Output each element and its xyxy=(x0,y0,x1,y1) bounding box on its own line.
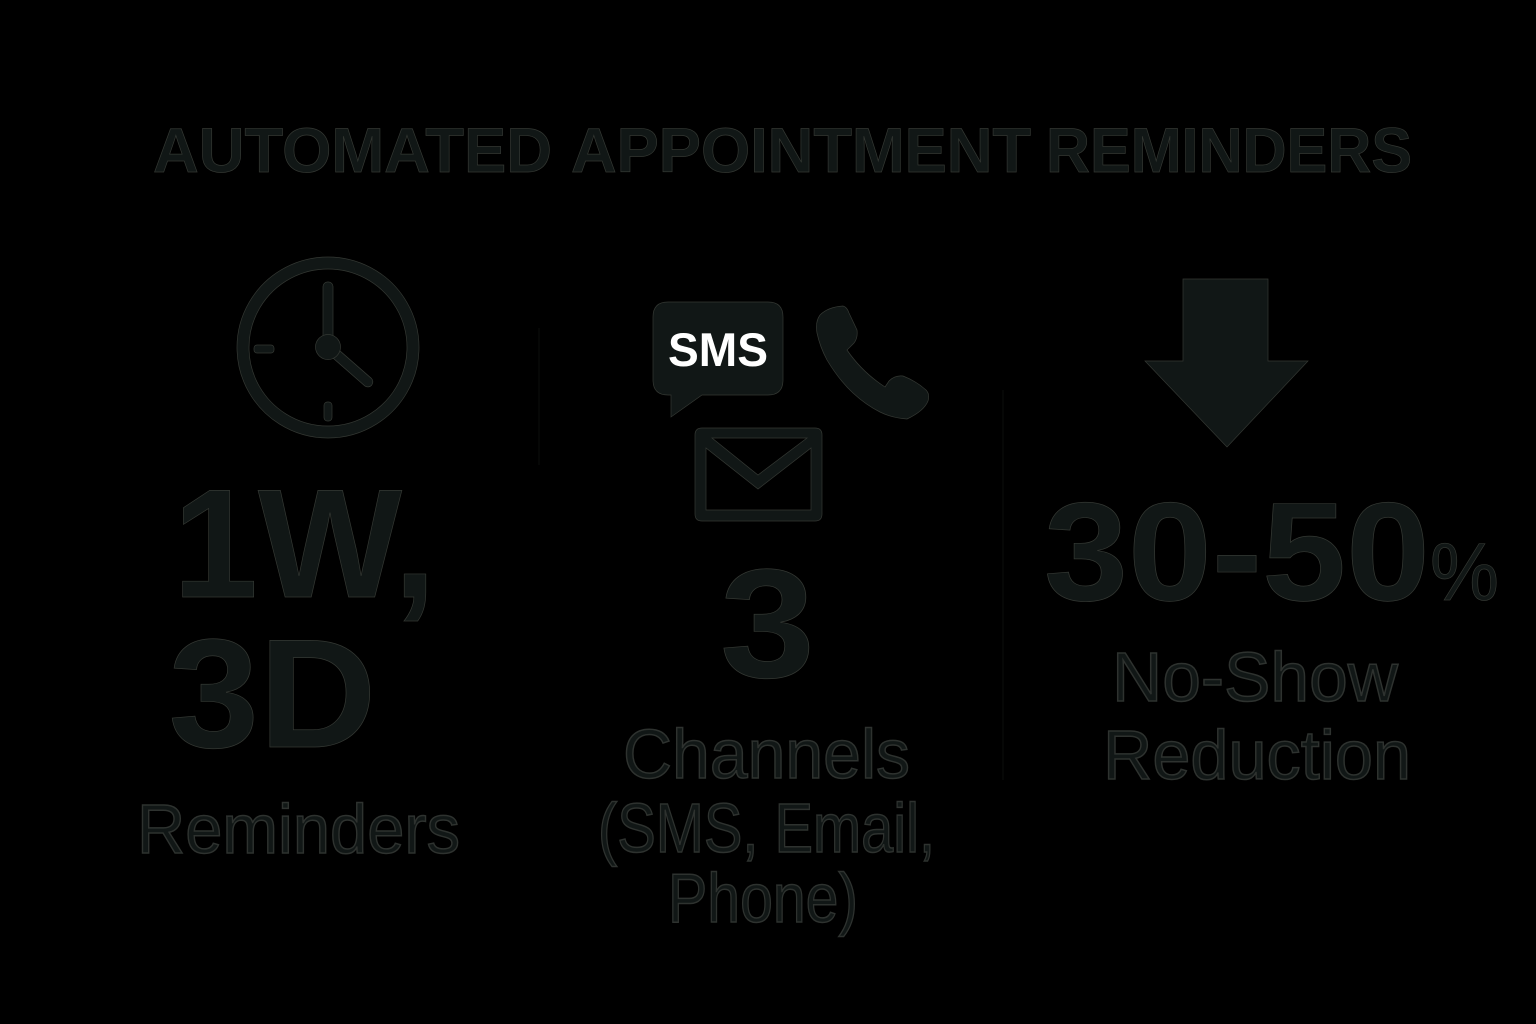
icon: clock xyxy=(237,257,419,438)
title: APPOINTMENT xyxy=(571,116,1031,186)
icon: envelope xyxy=(695,428,822,521)
panel: reminders timing xyxy=(137,257,460,868)
title: REMINDERS xyxy=(1046,116,1412,186)
label: No-Show Reduction: Reduction xyxy=(1103,716,1411,794)
label: channels list xyxy=(598,715,935,937)
icon: down arrow xyxy=(1145,279,1308,447)
label: channels list: (SMS, Email, xyxy=(598,789,935,867)
big value: 3: 3 xyxy=(720,537,815,710)
label: channels list: Phone) xyxy=(668,859,858,937)
panel: channels xyxy=(598,302,935,937)
big value: 1W, 3D: 1W, xyxy=(173,457,436,630)
label: No-Show Reduction xyxy=(1103,638,1411,794)
big value: 30-50%: % xyxy=(1430,527,1499,618)
big value: 1W, 3D xyxy=(168,457,436,780)
big value: 30-50%: 30-50 xyxy=(1044,473,1430,630)
label: No-Show Reduction: No-Show xyxy=(1112,638,1398,716)
icon: SMS speech bubble: SMS xyxy=(668,323,768,376)
label: channels list: Channels xyxy=(623,715,910,793)
icon: SMS speech bubble xyxy=(653,302,783,417)
label: Reminders: Reminders xyxy=(137,790,460,868)
title: AUTOMATED xyxy=(153,116,552,186)
title xyxy=(153,116,1412,186)
big value: 1W, 3D: 3D xyxy=(168,607,376,780)
panel: no-show reduction xyxy=(1044,279,1499,794)
icon: phone handset xyxy=(816,306,929,419)
